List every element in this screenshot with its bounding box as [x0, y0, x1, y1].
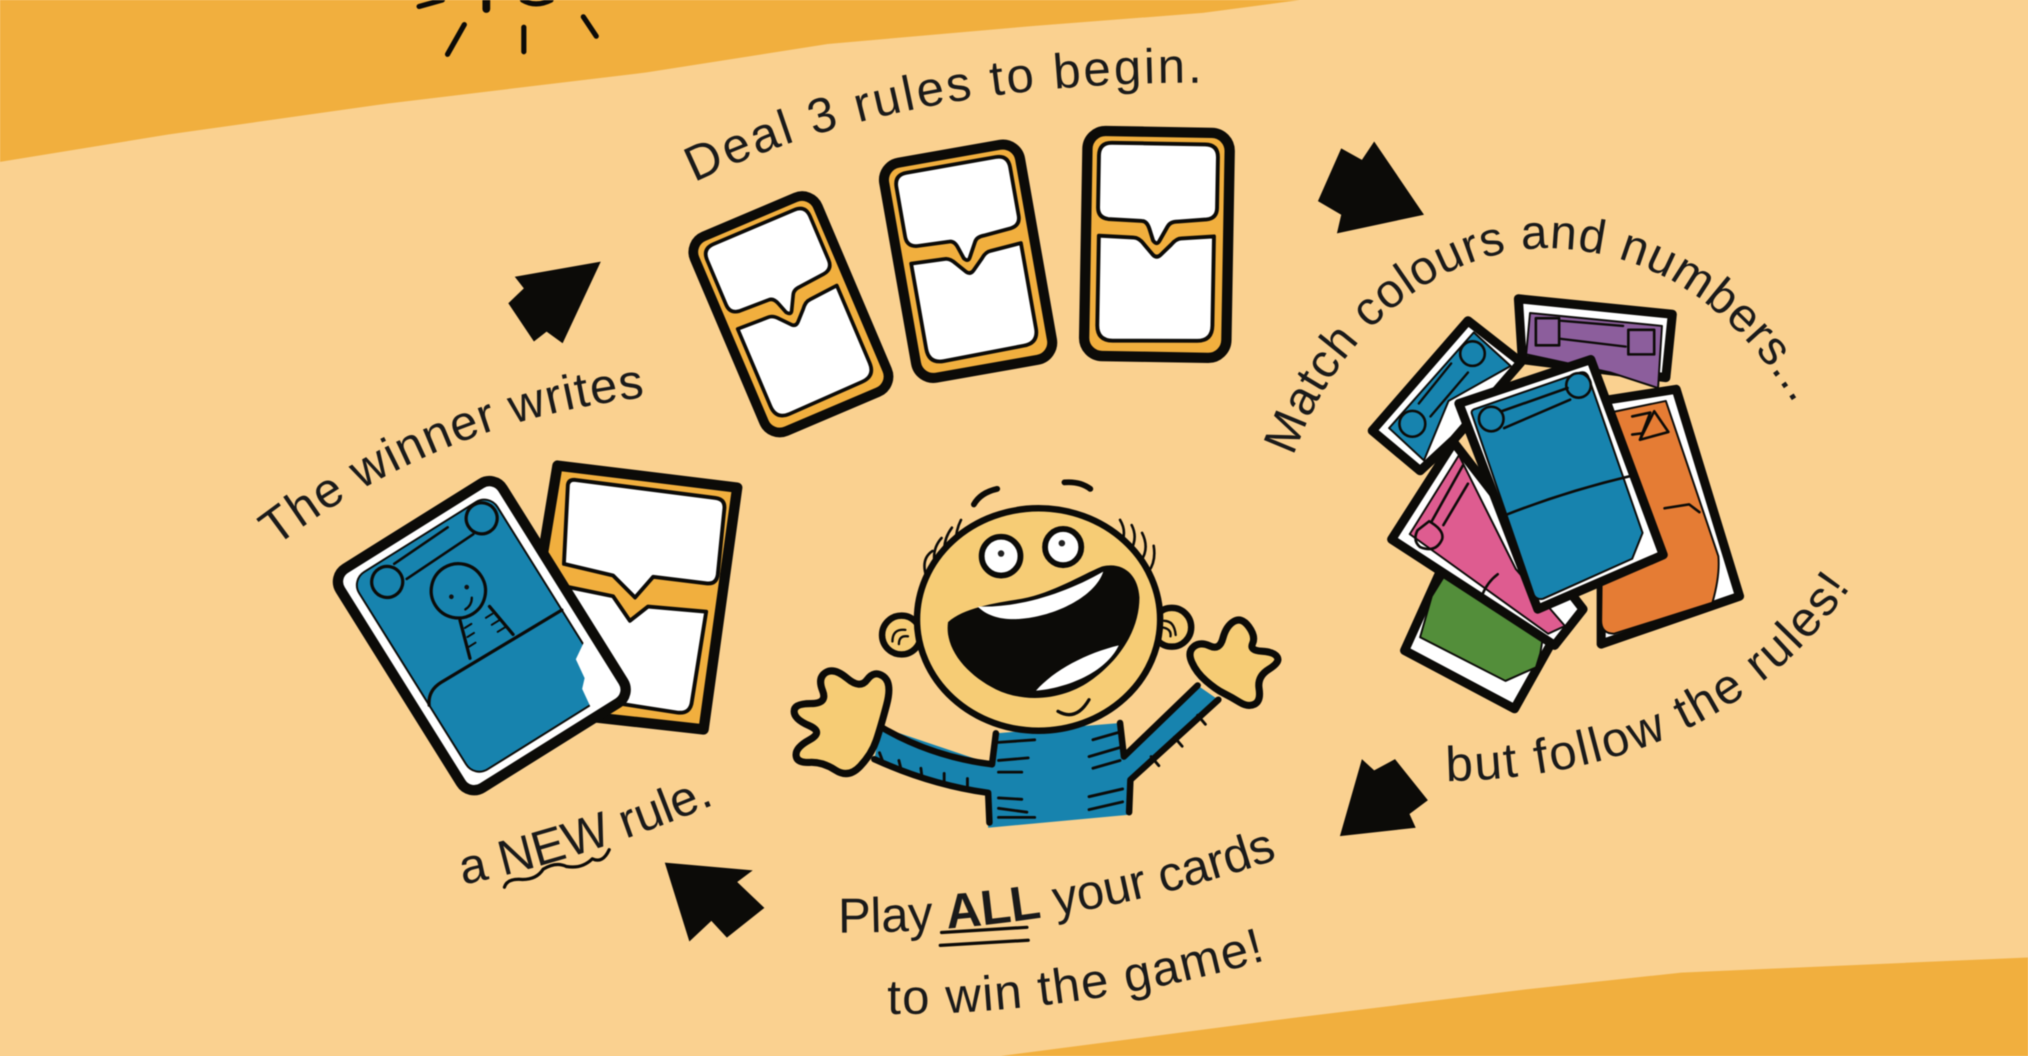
eyebrows [974, 482, 1090, 504]
hair [924, 520, 1154, 576]
arrow: to play [1340, 759, 1428, 836]
text: to win the game: to win the game! [887, 928, 1262, 1016]
text: a new rule: a NEW rule. [461, 787, 712, 884]
ear detail [892, 621, 1176, 644]
stick figure [421, 553, 516, 661]
eyes [982, 529, 1081, 576]
rule card 2 [881, 142, 1055, 381]
back rule card [517, 466, 737, 729]
card: green [1405, 559, 1562, 709]
arrow: to new rule [665, 863, 764, 942]
rule card 3 [1084, 131, 1230, 358]
text: match colours: Match colours and numbers... [1263, 218, 1797, 454]
connector circles [366, 561, 409, 603]
underline: all [940, 927, 1028, 945]
icon: sun rays [419, 0, 596, 54]
body: blue jumper [874, 685, 1218, 828]
winner blue card [332, 475, 631, 796]
text: deal 3 rules: Deal 3 rules to begin. [683, 47, 1198, 182]
arrow: to deal [508, 262, 601, 343]
text: play all your cards: Play ALL your cards [841, 833, 1275, 942]
card fan [1372, 299, 1740, 709]
chin [1058, 700, 1089, 715]
mouth [948, 565, 1139, 698]
teeth [978, 572, 1119, 691]
arrow: to match [1318, 141, 1424, 233]
bottom orange band [996, 957, 2028, 1056]
card: pink [1392, 442, 1583, 645]
card: blue front [1459, 360, 1663, 609]
head [917, 508, 1160, 731]
text: winner writes: The winner writes [256, 372, 643, 540]
ears [882, 608, 1191, 654]
card: orange [1601, 389, 1740, 644]
card: blue left [1372, 321, 1521, 471]
rule card 1 [688, 191, 894, 438]
character: cheering child [794, 482, 1278, 828]
text: follow the rules: but follow the rules! [1447, 570, 1848, 782]
left hand [794, 671, 889, 774]
right hand [1190, 620, 1278, 705]
top orange band [0, 0, 1300, 163]
card: purple [1518, 299, 1672, 388]
underline: new wavy [504, 850, 609, 887]
